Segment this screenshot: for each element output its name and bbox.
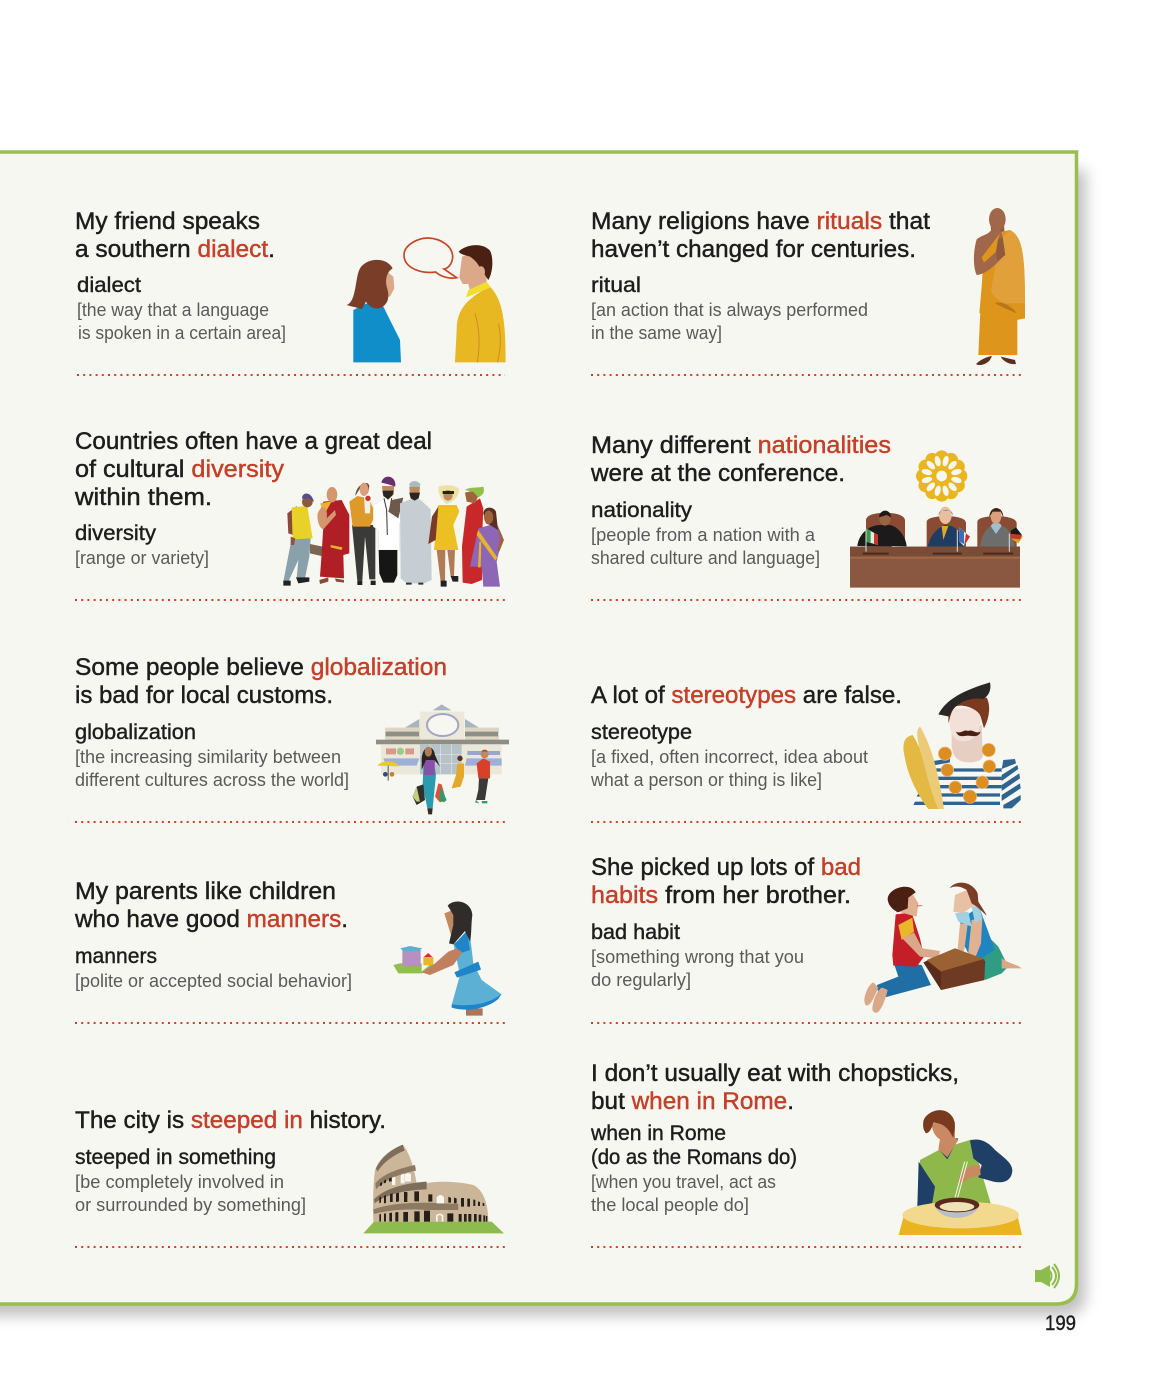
definition: [people from a nation with a — [591, 525, 816, 545]
entry: steeped in something — [75, 1107, 505, 1247]
definition — [591, 300, 868, 343]
definition: in the same way] — [591, 323, 722, 343]
term: (do as the Romans do) — [591, 1146, 797, 1169]
definition: [the increasing similarity between — [75, 747, 341, 767]
illustration: French stereotype man — [903, 682, 1021, 809]
term: dialect — [77, 274, 141, 297]
illustration: monk in orange robe — [974, 208, 1025, 365]
entry: bad habit — [591, 854, 1022, 1023]
definition: [something wrong that you — [591, 947, 804, 967]
heading: a southern dialect. — [75, 236, 275, 263]
definition: [a fixed, often incorrect, idea about — [591, 747, 868, 767]
heading: Countries often have a great deal — [75, 428, 432, 455]
definition — [75, 747, 349, 790]
illustration: two children arguing over a box — [864, 883, 1022, 1013]
heading — [590, 432, 891, 487]
heading: who have good manners. — [74, 906, 348, 933]
heading — [74, 428, 432, 511]
heading: haven’t changed for centuries. — [591, 236, 916, 263]
heading — [591, 854, 861, 909]
heading: A lot of stereotypes are false. — [591, 682, 902, 709]
illustration: people from many cultures — [283, 477, 504, 587]
entry: globalization — [75, 654, 509, 822]
entry: dialect — [75, 208, 506, 375]
heading: but when in Rome. — [591, 1088, 794, 1115]
term: steeped in something — [75, 1146, 276, 1169]
definition: [an action that is always performed — [591, 300, 868, 320]
definition — [591, 947, 804, 990]
illustration: conference panel with flags — [850, 450, 1023, 588]
definition — [591, 1172, 776, 1215]
heading: is bad for local customs. — [75, 682, 333, 709]
entry: ritual — [591, 208, 1025, 375]
heading — [591, 208, 930, 263]
definition — [590, 747, 868, 790]
heading: I don’t usually eat with chopsticks, — [591, 1060, 959, 1087]
term: ritual — [591, 274, 641, 297]
entry: when in Rome — [590, 1060, 1022, 1247]
definition — [591, 525, 820, 568]
term: nationality — [591, 499, 693, 522]
term: when in Rome — [590, 1122, 726, 1145]
illustration: girl carrying gifts — [393, 902, 502, 1016]
heading: The city is steeped in history. — [75, 1107, 386, 1134]
heading — [591, 1060, 959, 1115]
definition: [the way that a language — [77, 300, 269, 320]
term: manners — [75, 945, 157, 968]
entry: stereotype — [590, 682, 1021, 822]
term: bad habit — [591, 921, 680, 944]
term — [590, 1122, 797, 1169]
definition: is spoken in a certain area] — [78, 323, 286, 343]
definition — [75, 1172, 306, 1215]
illustration: two people talking — [347, 238, 506, 362]
heading: within them. — [74, 484, 212, 511]
heading: habits from her brother. — [591, 882, 851, 909]
heading: were at the conference. — [590, 460, 845, 487]
heading — [74, 878, 348, 933]
heading — [75, 654, 447, 709]
page number: 199 — [1045, 1312, 1076, 1335]
definition: or surrounded by something] — [75, 1195, 306, 1215]
heading: My friend speaks — [75, 208, 260, 235]
definition: [be completely involved in — [75, 1172, 284, 1192]
definition — [77, 300, 286, 343]
illustration: Colosseum — [363, 1145, 504, 1233]
icon: green audio speaker — [1035, 1264, 1059, 1288]
definition: [polite or accepted social behavior] — [75, 971, 352, 991]
definition: the local people do] — [591, 1195, 749, 1215]
illustration: man eating with chopsticks — [899, 1110, 1022, 1235]
term: stereotype — [591, 721, 692, 744]
definition: shared culture and language] — [591, 548, 820, 568]
heading: She picked up lots of bad — [591, 854, 861, 881]
heading: Many religions have rituals that — [591, 208, 930, 235]
heading: My parents like children — [75, 878, 336, 905]
definition: [range or variety] — [75, 548, 209, 568]
illustration: shopping mall with shoppers — [376, 704, 509, 814]
term: globalization — [75, 721, 196, 744]
definition: [when you travel, act as — [591, 1172, 776, 1192]
icon: gold flower emblem — [916, 450, 967, 502]
heading: Some people believe globalization — [75, 654, 447, 681]
definition: do regularly] — [591, 970, 691, 990]
heading: of cultural diversity — [75, 456, 284, 483]
panel: page background card — [0, 152, 1086, 1316]
entry: manners — [74, 878, 505, 1023]
heading: Many different nationalities — [591, 432, 891, 459]
entry: nationality — [590, 432, 1023, 600]
term: diversity — [75, 522, 157, 545]
heading — [75, 208, 275, 263]
definition: what a person or thing is like] — [590, 770, 822, 790]
entry: diversity — [74, 428, 505, 600]
definition: different cultures across the world] — [75, 770, 349, 790]
